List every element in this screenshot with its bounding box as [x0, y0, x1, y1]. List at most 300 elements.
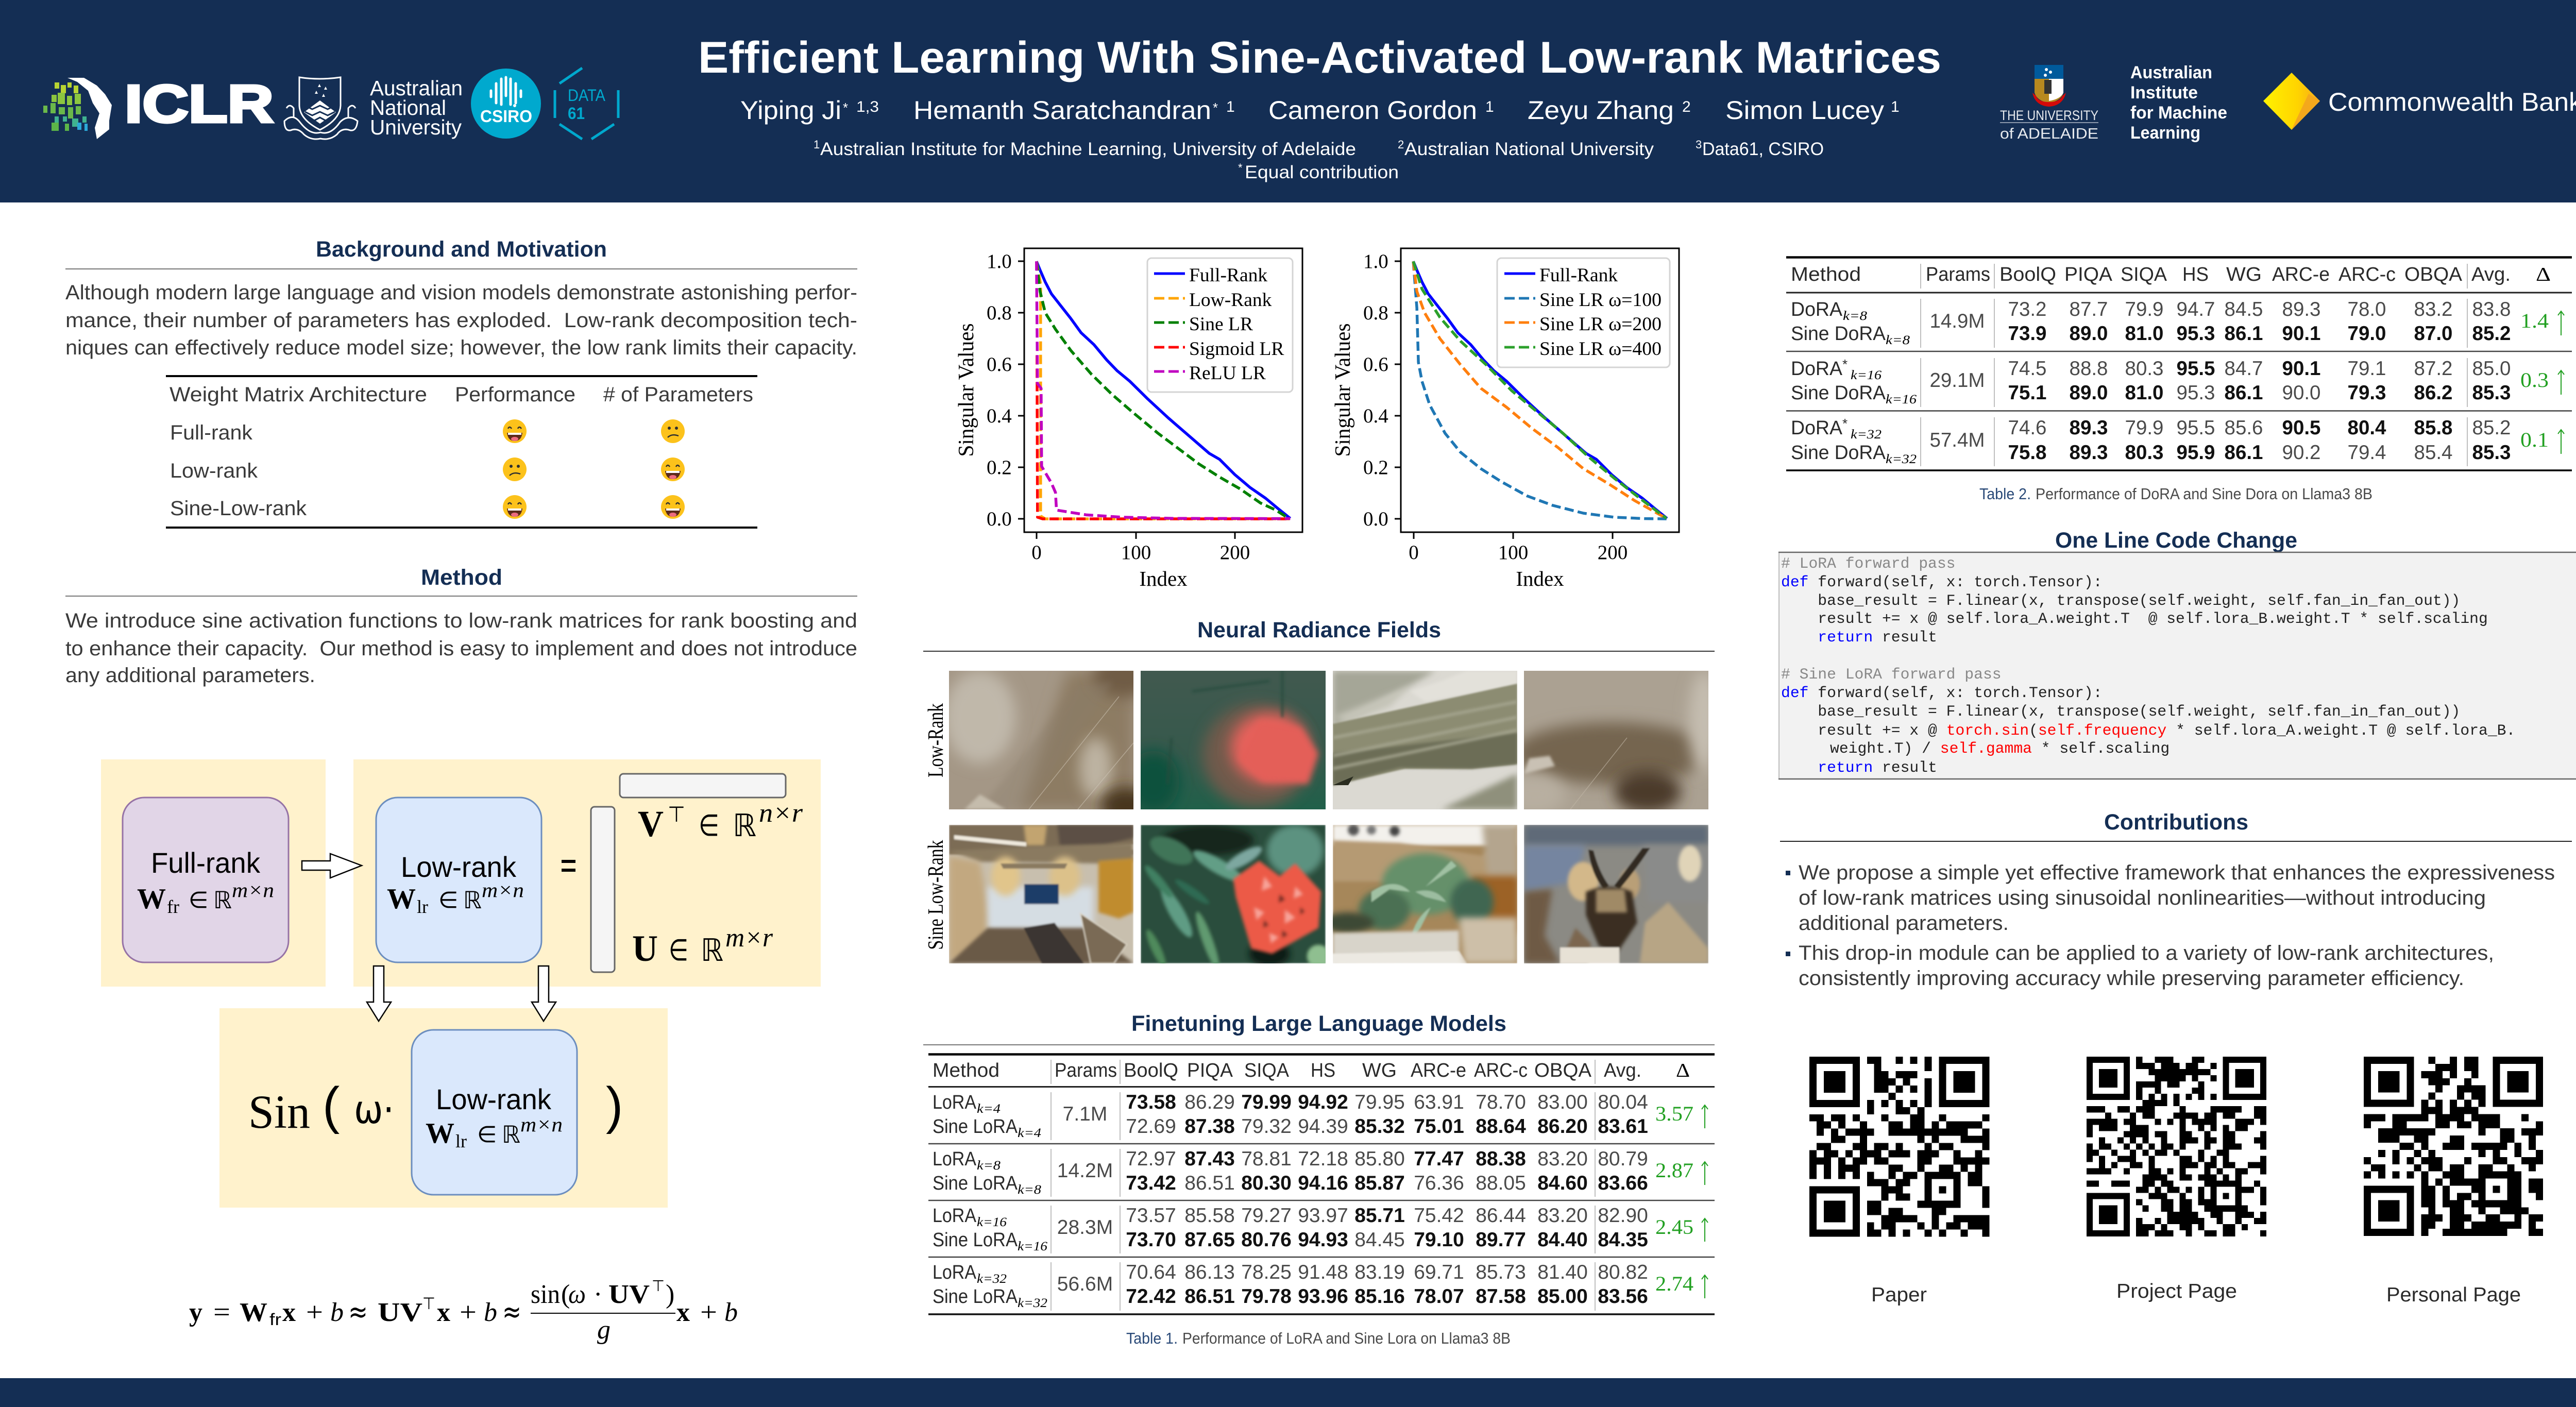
table 2 row k=8: 94.7 — [2177, 298, 2215, 320]
table 1 row k=8: 80.30 — [1241, 1172, 1292, 1194]
table 2 row k=32: k=32 — [1851, 428, 1882, 442]
equation: · — [594, 1280, 602, 1309]
table 1 header: BoolQ — [1124, 1060, 1178, 1081]
table 1 row k=8: 72.18 — [1298, 1148, 1348, 1170]
legend right: Sine LR ω=400 — [1539, 338, 1662, 360]
table 2 row k=32: 90.5 — [2282, 417, 2320, 439]
table 1 row k=32: k=32 — [977, 1272, 1007, 1286]
chart: singular values, left: 0.0 — [987, 508, 1012, 530]
table 1 row k=32: 85.00 — [1537, 1285, 1588, 1308]
chart: singular values, right: 1.0 — [1363, 250, 1388, 273]
table 1 row k=8: Sine LoRA — [933, 1173, 1018, 1194]
affiliations: Australian Institute for Machine Learning, University of Adelaide — [820, 139, 1356, 159]
table 2 row k=16: 81.0 — [2125, 382, 2163, 404]
logo: Australian National University: University — [370, 115, 462, 139]
chart: singular values, right: 0.4 — [1363, 405, 1388, 427]
chart: singular values, right: 100 — [1498, 541, 1528, 564]
logo: CSIRO: CSIRO — [480, 107, 532, 126]
logo: Data61 — [555, 68, 618, 139]
table 1 row k=4: LoRA — [933, 1092, 977, 1113]
table 1 row k=32: 69.71 — [1414, 1261, 1464, 1283]
box: low-rank: m×n — [482, 878, 524, 902]
code listing: result += x @ self.lora_A.weight.T @ self.lora_B.weight.T * self.scaling — [1781, 610, 2488, 628]
table 1 row k=16: 84.45 — [1354, 1229, 1405, 1251]
image: low-rank room — [949, 671, 1133, 809]
authors: 2 — [1682, 98, 1691, 115]
table 1 row k=4: 80.04 — [1598, 1091, 1648, 1113]
table 2 row k=8: 84.5 — [2225, 298, 2263, 320]
box: low-rank inside sine: W — [426, 1117, 454, 1149]
table 1 row k=4: 73.58 — [1126, 1091, 1176, 1113]
panel: one line code change — [1778, 528, 2576, 779]
table 2 row k=8: 79.9 — [2125, 298, 2163, 320]
label: V in R n by r: n×r — [759, 799, 803, 828]
table 2 row k=8: 83.2 — [2414, 298, 2452, 320]
equation: y — [189, 1298, 202, 1327]
table 1 row k=4: 86.20 — [1537, 1115, 1588, 1138]
arrow: right — [302, 854, 362, 878]
table 2 row k=32: 95.5 — [2177, 417, 2215, 439]
label: U in R m by r: ∈ — [669, 933, 688, 968]
table 1 row k=32: 80.82 — [1598, 1261, 1648, 1283]
equation: x — [676, 1298, 690, 1327]
table 1 row k=16: k=16 — [1018, 1240, 1048, 1253]
label: U in R m by r — [632, 923, 773, 969]
table 1 row k=32: 83.56 — [1598, 1285, 1648, 1308]
logo: Australian National University: Australian — [370, 76, 463, 100]
comparison table: Weight Matrix Architecture — [170, 383, 427, 406]
table 1 header: PIQA — [1187, 1060, 1233, 1081]
table 1 header: ARC-c — [1474, 1060, 1528, 1081]
table 1 row k=16: 79.10 — [1414, 1229, 1464, 1251]
box: low-rank: ℝ — [463, 886, 482, 914]
table 1 row k=16: 85.71 — [1354, 1205, 1405, 1227]
table 1 header: ARC-e — [1411, 1060, 1466, 1081]
code listing: # Sine LoRA forward pass — [1781, 666, 2002, 683]
table 2 row k=32: 0.1 — [2520, 428, 2549, 451]
panel: neural radiance fields — [923, 618, 1720, 972]
QR code: personal page — [2364, 1057, 2543, 1236]
QR label: project page: Project Page — [2116, 1280, 2237, 1302]
panel: finetuning large language models — [923, 1011, 1715, 1347]
equation: g — [597, 1315, 611, 1345]
logo: Australian Institute for Machine Learning — [2130, 63, 2227, 143]
table 1 header — [933, 1060, 1690, 1081]
table 1 — [928, 1054, 1715, 1314]
legend left: Full-Rank — [1189, 265, 1267, 286]
panel: contributions — [1780, 810, 2572, 1306]
table 2 row k=32: k=32 — [1886, 452, 1917, 466]
legend left — [1147, 258, 1293, 392]
table 2 header — [1791, 264, 2551, 285]
table 2 row k=32: DoRA — [1791, 417, 1843, 439]
table 1 row k=16: 28.3M — [1057, 1216, 1113, 1239]
affiliations: Australian National University — [1404, 139, 1654, 159]
code listing: result += x @ torch.sin(self.frequency * self.lora_A.weight.T @ self.lora_B. — [1781, 722, 2515, 739]
table 1 row k=16: Sine LoRA — [933, 1229, 1018, 1251]
table 2 row k=16: 89.0 — [2070, 382, 2108, 404]
caption: table 2: Table 2. — [1979, 485, 2031, 503]
logo: Australian National University — [284, 76, 463, 139]
table 1 row k=32: 83.19 — [1354, 1261, 1405, 1283]
table 2 row k=16: DoRA — [1791, 358, 1843, 380]
heading: finetuning: Finetuning Large Language Models — [1131, 1011, 1506, 1036]
table 1 row k=4: 88.64 — [1476, 1115, 1526, 1138]
caption: table 1: Performance of LoRA and Sine Lora on Llama3 8B — [1182, 1329, 1511, 1347]
method text: to enhance their capacity. Our method is easy to implement and does not introduce — [65, 637, 857, 660]
icon: happy emoji — [661, 495, 685, 519]
chart: singular values, right: 200 — [1598, 541, 1628, 564]
table 1 header: Avg. — [1604, 1060, 1641, 1081]
table 1 row k=16: 73.70 — [1126, 1229, 1176, 1251]
table 1 row k=8: 85.87 — [1354, 1172, 1405, 1194]
code listing: # LoRA forward pass — [1781, 555, 1956, 572]
code listing: weight.T) / self.gamma * self.scaling — [1830, 740, 2170, 757]
table 2 row k=16: 84.7 — [2225, 358, 2263, 380]
table 1 row k=32: 70.64 — [1126, 1261, 1176, 1283]
table 1 row k=32: 78.25 — [1241, 1261, 1292, 1283]
box: full-rank — [123, 798, 289, 962]
table 1 row k=8: 73.42 — [1126, 1172, 1176, 1194]
affiliations: Equal contribution — [1245, 162, 1399, 182]
table 1 row k=16: 86.44 — [1476, 1205, 1526, 1227]
box: full-rank: ∈ — [189, 887, 208, 913]
table 2 row k=8: 89.3 — [2282, 298, 2320, 320]
table 1 row k=8: 84.60 — [1537, 1172, 1588, 1194]
comparison table: # of Parameters — [603, 383, 753, 406]
sine wrapper: Sin — [248, 1086, 310, 1138]
background text — [65, 281, 857, 359]
comparison table — [166, 375, 757, 529]
table 2 row k=8: 86.1 — [2225, 323, 2263, 345]
table 2 row k=16: 86.2 — [2414, 382, 2452, 404]
table 2 row k=8: 87.0 — [2414, 323, 2452, 345]
chart: singular values, right: 0.8 — [1363, 302, 1388, 324]
QR code: project page — [2087, 1057, 2266, 1236]
curves left — [1037, 261, 1290, 519]
table 1 row k=32: 93.96 — [1298, 1285, 1348, 1308]
table 1 row k=8: 83.66 — [1598, 1172, 1648, 1194]
icon: sad emoji — [503, 457, 527, 481]
logo: CSIRO — [471, 69, 541, 139]
table 2 row k=32: 85.6 — [2225, 417, 2263, 439]
code listing: def forward(self, x: torch.Tensor): — [1781, 573, 2103, 591]
table 2 row k=16: 79.1 — [2348, 358, 2386, 380]
panel: method — [65, 565, 857, 1345]
authors: 1 — [1485, 98, 1494, 115]
chart: singular values, right: Index — [1516, 567, 1564, 590]
table 2 header: Δ — [2536, 264, 2551, 285]
caption: table 1: Table 1. — [1126, 1329, 1178, 1347]
chart: singular values, right: 0.0 — [1363, 508, 1388, 530]
chart: singular values, left: 100 — [1121, 541, 1151, 564]
equation: b — [724, 1298, 738, 1327]
chart: singular values, left — [955, 248, 1302, 590]
table 1 header: HS — [1311, 1060, 1335, 1081]
table 2 row k=16: 0.3 — [2520, 368, 2549, 392]
factor: U bar — [591, 807, 615, 972]
authors: Hemanth Saratchandran — [913, 96, 1211, 125]
table 1 row k=8: 83.20 — [1537, 1148, 1588, 1170]
table 2 header: Method — [1791, 264, 1861, 285]
table 2 row k=16: 85.0 — [2472, 358, 2511, 380]
table 1 row k=4: Sine LoRA — [933, 1116, 1018, 1138]
box: low-rank: lr — [417, 896, 428, 917]
table 1 row k=16: 87.65 — [1184, 1229, 1235, 1251]
table 2 row k=16: 29.1M — [1929, 369, 1985, 392]
table 2 row k=16: 80.3 — [2125, 358, 2163, 380]
method text — [65, 609, 857, 687]
table 2 row k=32 — [1791, 416, 2564, 466]
table 1 row k=8: 2.87 — [1655, 1159, 1693, 1182]
logo: Commonwealth Bank — [2263, 73, 2576, 130]
table 2 row k=8: 73.9 — [2008, 323, 2046, 345]
table 1 row k=8: 94.16 — [1298, 1172, 1348, 1194]
caption: table 2: Performance of DoRA and Sine Dora on Llama3 8B — [2036, 485, 2372, 503]
authors: 1 — [1891, 98, 1900, 115]
table 2 row k=16: 90.1 — [2282, 358, 2320, 380]
legend left: ReLU LR — [1189, 363, 1266, 384]
table 2 row k=32: 95.9 — [2177, 442, 2215, 464]
table 2 row k=8: 83.8 — [2472, 298, 2511, 320]
table 1 row k=16: k=16 — [977, 1215, 1007, 1229]
authors — [740, 96, 1900, 125]
table 1 row k=32: 86.13 — [1184, 1261, 1235, 1283]
table 2 header: Avg. — [2471, 264, 2511, 285]
box: low-rank: W — [387, 883, 416, 915]
row label: low-rank: Low-Rank — [924, 703, 948, 777]
table 1 row k=8: 78.81 — [1241, 1148, 1292, 1170]
label: U in R m by r: U — [632, 928, 658, 969]
image: low-rank scene — [1524, 671, 1708, 809]
box: low-rank inside sine: m×n — [520, 1113, 563, 1136]
logo: Australian Institute for Machine Learning: Australian — [2130, 63, 2212, 82]
table 1 row k=32: k=32 — [1018, 1296, 1047, 1310]
table 2 row k=16: 85.3 — [2472, 382, 2511, 404]
table 1 row k=4: 83.00 — [1537, 1091, 1588, 1113]
logo: University of Adelaide: of ADELAIDE — [2000, 126, 2098, 142]
table 1 row k=32 — [933, 1261, 1708, 1310]
table 2 row k=32: 74.6 — [2008, 417, 2046, 439]
table 1 row k=4: 7.1M — [1063, 1103, 1107, 1125]
legend left: Sine LR — [1189, 314, 1253, 335]
affiliations: 3 — [1696, 138, 1702, 151]
label: V in R n by r: ℝ — [733, 808, 756, 844]
table 1 row k=8: 88.38 — [1476, 1148, 1526, 1170]
contribution bullets: of low-rank matrices using sinusoidal nonlinearities—without introducing — [1799, 887, 2486, 909]
box: low-rank inside sine: ℝ — [502, 1121, 520, 1148]
table 2 header: PIQA — [2064, 264, 2113, 285]
table 1 row k=8: 77.47 — [1414, 1148, 1464, 1170]
logo: Australian Institute for Machine Learning: Learning — [2130, 123, 2200, 143]
affiliations — [814, 138, 1824, 182]
legend right: Sine LR ω=100 — [1539, 290, 1662, 311]
table 2 — [1786, 258, 2572, 470]
table 1 row k=4: 94.39 — [1298, 1115, 1348, 1138]
table 1 row k=4: 79.95 — [1354, 1091, 1405, 1113]
table 1 row k=4: 94.92 — [1298, 1091, 1348, 1113]
table 2 row k=8: 79.0 — [2348, 323, 2386, 345]
comparison table: Low-rank — [170, 460, 258, 482]
table 1 row k=16: 84.35 — [1598, 1229, 1648, 1251]
table 2 row k=8: 87.7 — [2070, 298, 2108, 320]
equation — [189, 1277, 738, 1345]
table 1 row k=32: LoRA — [933, 1262, 977, 1283]
table 1 row k=4: 63.91 — [1414, 1091, 1464, 1113]
table 1 row k=16: 2.45 — [1655, 1215, 1693, 1239]
table 1 header: OBQA — [1534, 1060, 1592, 1081]
table 1 row k=4: k=4 — [1018, 1126, 1041, 1140]
table 2 header: WG — [2226, 264, 2262, 285]
table 2 row k=16 — [1791, 357, 2564, 406]
table 2 row k=16: 74.5 — [2008, 358, 2046, 380]
row label: sine low-rank: Sine Low-Rank — [924, 840, 948, 950]
table 1 row k=4: k=4 — [977, 1102, 1001, 1116]
box: full-rank: fr — [167, 896, 179, 917]
box: low-rank — [376, 798, 541, 962]
chart: singular values, right: 0.2 — [1363, 456, 1388, 479]
QR label: personal page: Personal Page — [2386, 1284, 2521, 1306]
comparison table: Performance — [455, 383, 575, 406]
table 2 row k=32: 80.4 — [2348, 417, 2386, 439]
comparison table: Full-rank — [170, 421, 253, 444]
code listing: return result — [1781, 759, 1937, 776]
equation: ⊤ — [652, 1277, 665, 1295]
poster title: Efficient Learning With Sine-Activated Low-rank Matrices — [698, 33, 1941, 82]
contribution bullets: consistently improving accuracy while preserving parameter efficiency. — [1799, 967, 2464, 990]
box: low-rank inside sine — [412, 1030, 577, 1195]
table 1 row k=4 — [933, 1091, 1708, 1140]
table 2 header: SIQA — [2121, 264, 2167, 285]
table 1 row k=16: 75.42 — [1414, 1205, 1464, 1227]
table 1 row k=16: LoRA — [933, 1205, 977, 1227]
table 2 header: HS — [2182, 264, 2209, 285]
table 2 row k=8: Sine DoRA — [1791, 323, 1886, 345]
box: low-rank inside sine: Low-rank — [436, 1083, 552, 1115]
table 2 row k=32: 57.4M — [1929, 429, 1985, 451]
table 1 row k=8: 85.80 — [1354, 1148, 1405, 1170]
table 1 row k=8: k=8 — [1018, 1183, 1042, 1197]
label: V in R n by r: V — [638, 803, 664, 844]
table 2 row k=8: 95.3 — [2177, 323, 2215, 345]
box: full-rank: m×n — [232, 878, 274, 902]
table 2 row k=32: 86.1 — [2225, 442, 2263, 464]
arrow: down left — [367, 966, 391, 1021]
logo: Commonwealth Bank: Commonwealth Bank — [2328, 88, 2576, 116]
table 1 row k=4: 79.99 — [1241, 1091, 1292, 1113]
chart: singular values, left: 200 — [1220, 541, 1250, 564]
chart: singular values, left: Singular Values — [955, 324, 978, 456]
heading: one line code change: One Line Code Change — [2055, 528, 2297, 553]
table 1 row k=32: 86.51 — [1184, 1285, 1235, 1308]
table 2 row k=8: 14.9M — [1929, 310, 1985, 332]
code listing — [1778, 552, 2576, 779]
table 1 header: Δ — [1676, 1060, 1690, 1081]
equation: x — [282, 1298, 296, 1327]
equation: b — [330, 1298, 344, 1327]
table 1 row k=16: 82.90 — [1598, 1205, 1648, 1227]
icon: happy emoji — [503, 419, 527, 443]
table 1 row k=8: 86.51 — [1184, 1172, 1235, 1194]
table 2 row k=8: 89.0 — [2070, 323, 2108, 345]
table 1 row k=8: k=8 — [977, 1159, 1001, 1173]
table 2 row k=32: Sine DoRA — [1791, 442, 1886, 464]
table 2 row k=8: 81.0 — [2125, 323, 2163, 345]
table 2 row k=16: 87.2 — [2414, 358, 2452, 380]
box: low-rank: ∈ — [438, 887, 458, 913]
image: low-rank plant — [1333, 671, 1517, 809]
table 2 row k=16: 90.0 — [2282, 382, 2320, 404]
table 2 row k=8: 73.2 — [2008, 298, 2046, 320]
box: full-rank: Full-rank — [151, 846, 261, 879]
legend right: Full-Rank — [1539, 265, 1618, 286]
comparison table: Sine-Low-rank — [170, 497, 307, 520]
table 2 row k=32: 90.2 — [2282, 442, 2320, 464]
table 1 row k=32: 91.48 — [1298, 1261, 1348, 1283]
logo: Data61: DATA — [568, 86, 606, 105]
equation: ( — [561, 1280, 570, 1309]
label: U in R m by r: ℝ — [701, 933, 723, 969]
logo: University of Adelaide: THE UNIVERSITY — [2000, 108, 2098, 123]
heading: neural radiance fields: Neural Radiance Fields — [1197, 618, 1441, 642]
method text: any additional parameters. — [65, 664, 315, 687]
table 2 row k=8: 78.0 — [2348, 298, 2386, 320]
table 2 row k=32: 85.2 — [2472, 417, 2511, 439]
table 1 row k=4: 79.32 — [1241, 1115, 1292, 1138]
table 1 row k=32: 85.16 — [1354, 1285, 1405, 1308]
image: sine low-rank trophy scene — [1524, 825, 1708, 963]
header band — [0, 0, 2576, 202]
table 1 row k=32: 56.6M — [1057, 1273, 1113, 1295]
equation: = — [213, 1298, 230, 1327]
box: low-rank inside sine: lr — [455, 1131, 467, 1151]
image: sine low-rank flower — [1141, 825, 1326, 963]
chart: singular values, left: 0.6 — [987, 353, 1012, 376]
box: low-rank inside sine: ∈ — [477, 1122, 497, 1148]
table 2 row k=16: 88.8 — [2070, 358, 2108, 380]
table 2 row k=16: 79.3 — [2348, 382, 2386, 404]
table 2 row k=32: 79.4 — [2348, 442, 2386, 464]
table 1 row k=4: 72.69 — [1126, 1115, 1176, 1138]
table 2 row k=8: 1.4 — [2520, 309, 2549, 332]
method text: We introduce sine activation functions to low-rank matrices for rank boosting and — [65, 609, 857, 632]
table 2 row k=16: * — [1842, 357, 1848, 372]
authors: Cameron Gordon — [1268, 96, 1477, 125]
chart: singular values, left: 0.2 — [987, 456, 1012, 479]
table 1 row k=8 — [933, 1148, 1708, 1197]
affiliations: 2 — [1398, 138, 1404, 151]
logo: Data61: 61 — [568, 104, 585, 123]
equation: W — [240, 1298, 267, 1327]
table 1 row k=8: LoRA — [933, 1148, 977, 1170]
table 2 row k=32: 80.3 — [2125, 442, 2163, 464]
table 2 row k=16: k=16 — [1851, 368, 1882, 382]
icon: happy emoji — [661, 457, 685, 481]
table 1 row k=4: 86.29 — [1184, 1091, 1235, 1113]
table 2 row k=16: 95.3 — [2177, 382, 2215, 404]
background text: niques can effectively reduce model size; however, the low rank limits their capacity. — [65, 336, 857, 359]
table 1 row k=32: Sine LoRA — [933, 1286, 1018, 1308]
chart: singular values, left: 0.8 — [987, 302, 1012, 324]
table 1 row k=32: 78.07 — [1414, 1285, 1464, 1308]
equation: + — [460, 1298, 477, 1327]
table 2 row k=8: k=8 — [1843, 309, 1868, 323]
chart: singular values, right — [1331, 248, 1679, 590]
logo: ICLR: ICLR — [125, 74, 274, 133]
image: low-rank flower — [1141, 671, 1326, 809]
equation: ≈ — [502, 1294, 521, 1329]
logo: University of Adelaide — [2000, 65, 2098, 142]
